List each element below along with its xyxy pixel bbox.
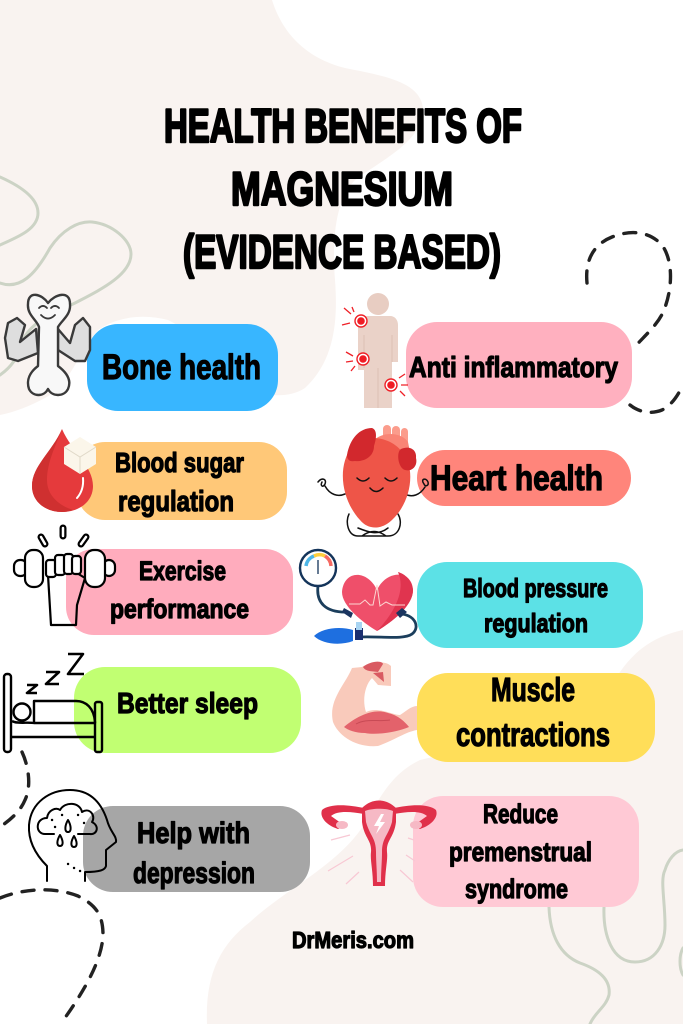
panel: reduce premenstrual syndrome	[413, 796, 639, 907]
panel: reduce premenstrual syndrome: syndrome	[465, 874, 568, 904]
panel: exercise performance	[66, 549, 293, 635]
panel: muscle contractions: Muscle	[491, 671, 575, 708]
background blob: top left	[0, 0, 423, 415]
panel: help with depression: depression	[133, 857, 255, 890]
icon: flexing bone	[5, 295, 90, 395]
icon: heart with blood pressure cuff	[300, 550, 416, 644]
panel: better sleep: Better sleep	[117, 688, 258, 720]
panel: blood sugar regulation: Blood sugar	[115, 447, 244, 478]
panel: reduce premenstrual syndrome: Reduce	[483, 799, 558, 829]
panel: blood sugar regulation	[77, 442, 287, 520]
panel: heart health: Heart health	[430, 459, 603, 498]
panel: heart health	[417, 450, 631, 506]
icon: uterus with lightning	[321, 800, 437, 886]
panel: better sleep	[74, 667, 301, 753]
title: MAGNESIUM	[231, 162, 453, 215]
panel: exercise performance: performance	[110, 594, 249, 624]
icon: flexed arm muscle	[332, 662, 417, 746]
panel: blood sugar regulation: regulation	[118, 486, 234, 518]
website credit: DrMeris.com	[292, 927, 414, 953]
panel: blood pressure regulation: regulation	[484, 608, 588, 638]
title: HEALTH BENEFITS OF	[164, 99, 522, 152]
panel: bone health: Bone health	[102, 348, 261, 387]
panel: exercise performance: Exercise	[139, 556, 226, 586]
panel: anti inflammatory: Anti inflammatory	[409, 352, 618, 384]
title: (EVIDENCE BASED)	[183, 225, 501, 278]
panel: blood pressure regulation: Blood pressure	[463, 573, 608, 603]
background blob: bottom right	[207, 630, 683, 1024]
decorative dashed lines	[0, 233, 683, 1022]
icon: meditating heart	[318, 425, 428, 536]
panel: help with depression: Help with	[137, 817, 250, 850]
panel: muscle contractions	[417, 671, 655, 762]
icon: blood drop with sugar cube	[32, 429, 96, 512]
panel: help with depression	[83, 806, 310, 892]
icon: person sleeping in bed	[4, 654, 102, 752]
panel: reduce premenstrual syndrome: premenstrual	[449, 837, 592, 867]
panel: bone health	[87, 324, 278, 411]
panel: anti inflammatory	[406, 322, 632, 408]
title	[164, 99, 522, 278]
icon: hand lifting dumbbell	[14, 528, 115, 625]
panel: blood pressure regulation	[417, 562, 643, 648]
panel: muscle contractions: contractions	[456, 716, 610, 753]
icon: head with rain cloud	[29, 790, 116, 881]
icon: body with inflammation points	[342, 293, 408, 408]
